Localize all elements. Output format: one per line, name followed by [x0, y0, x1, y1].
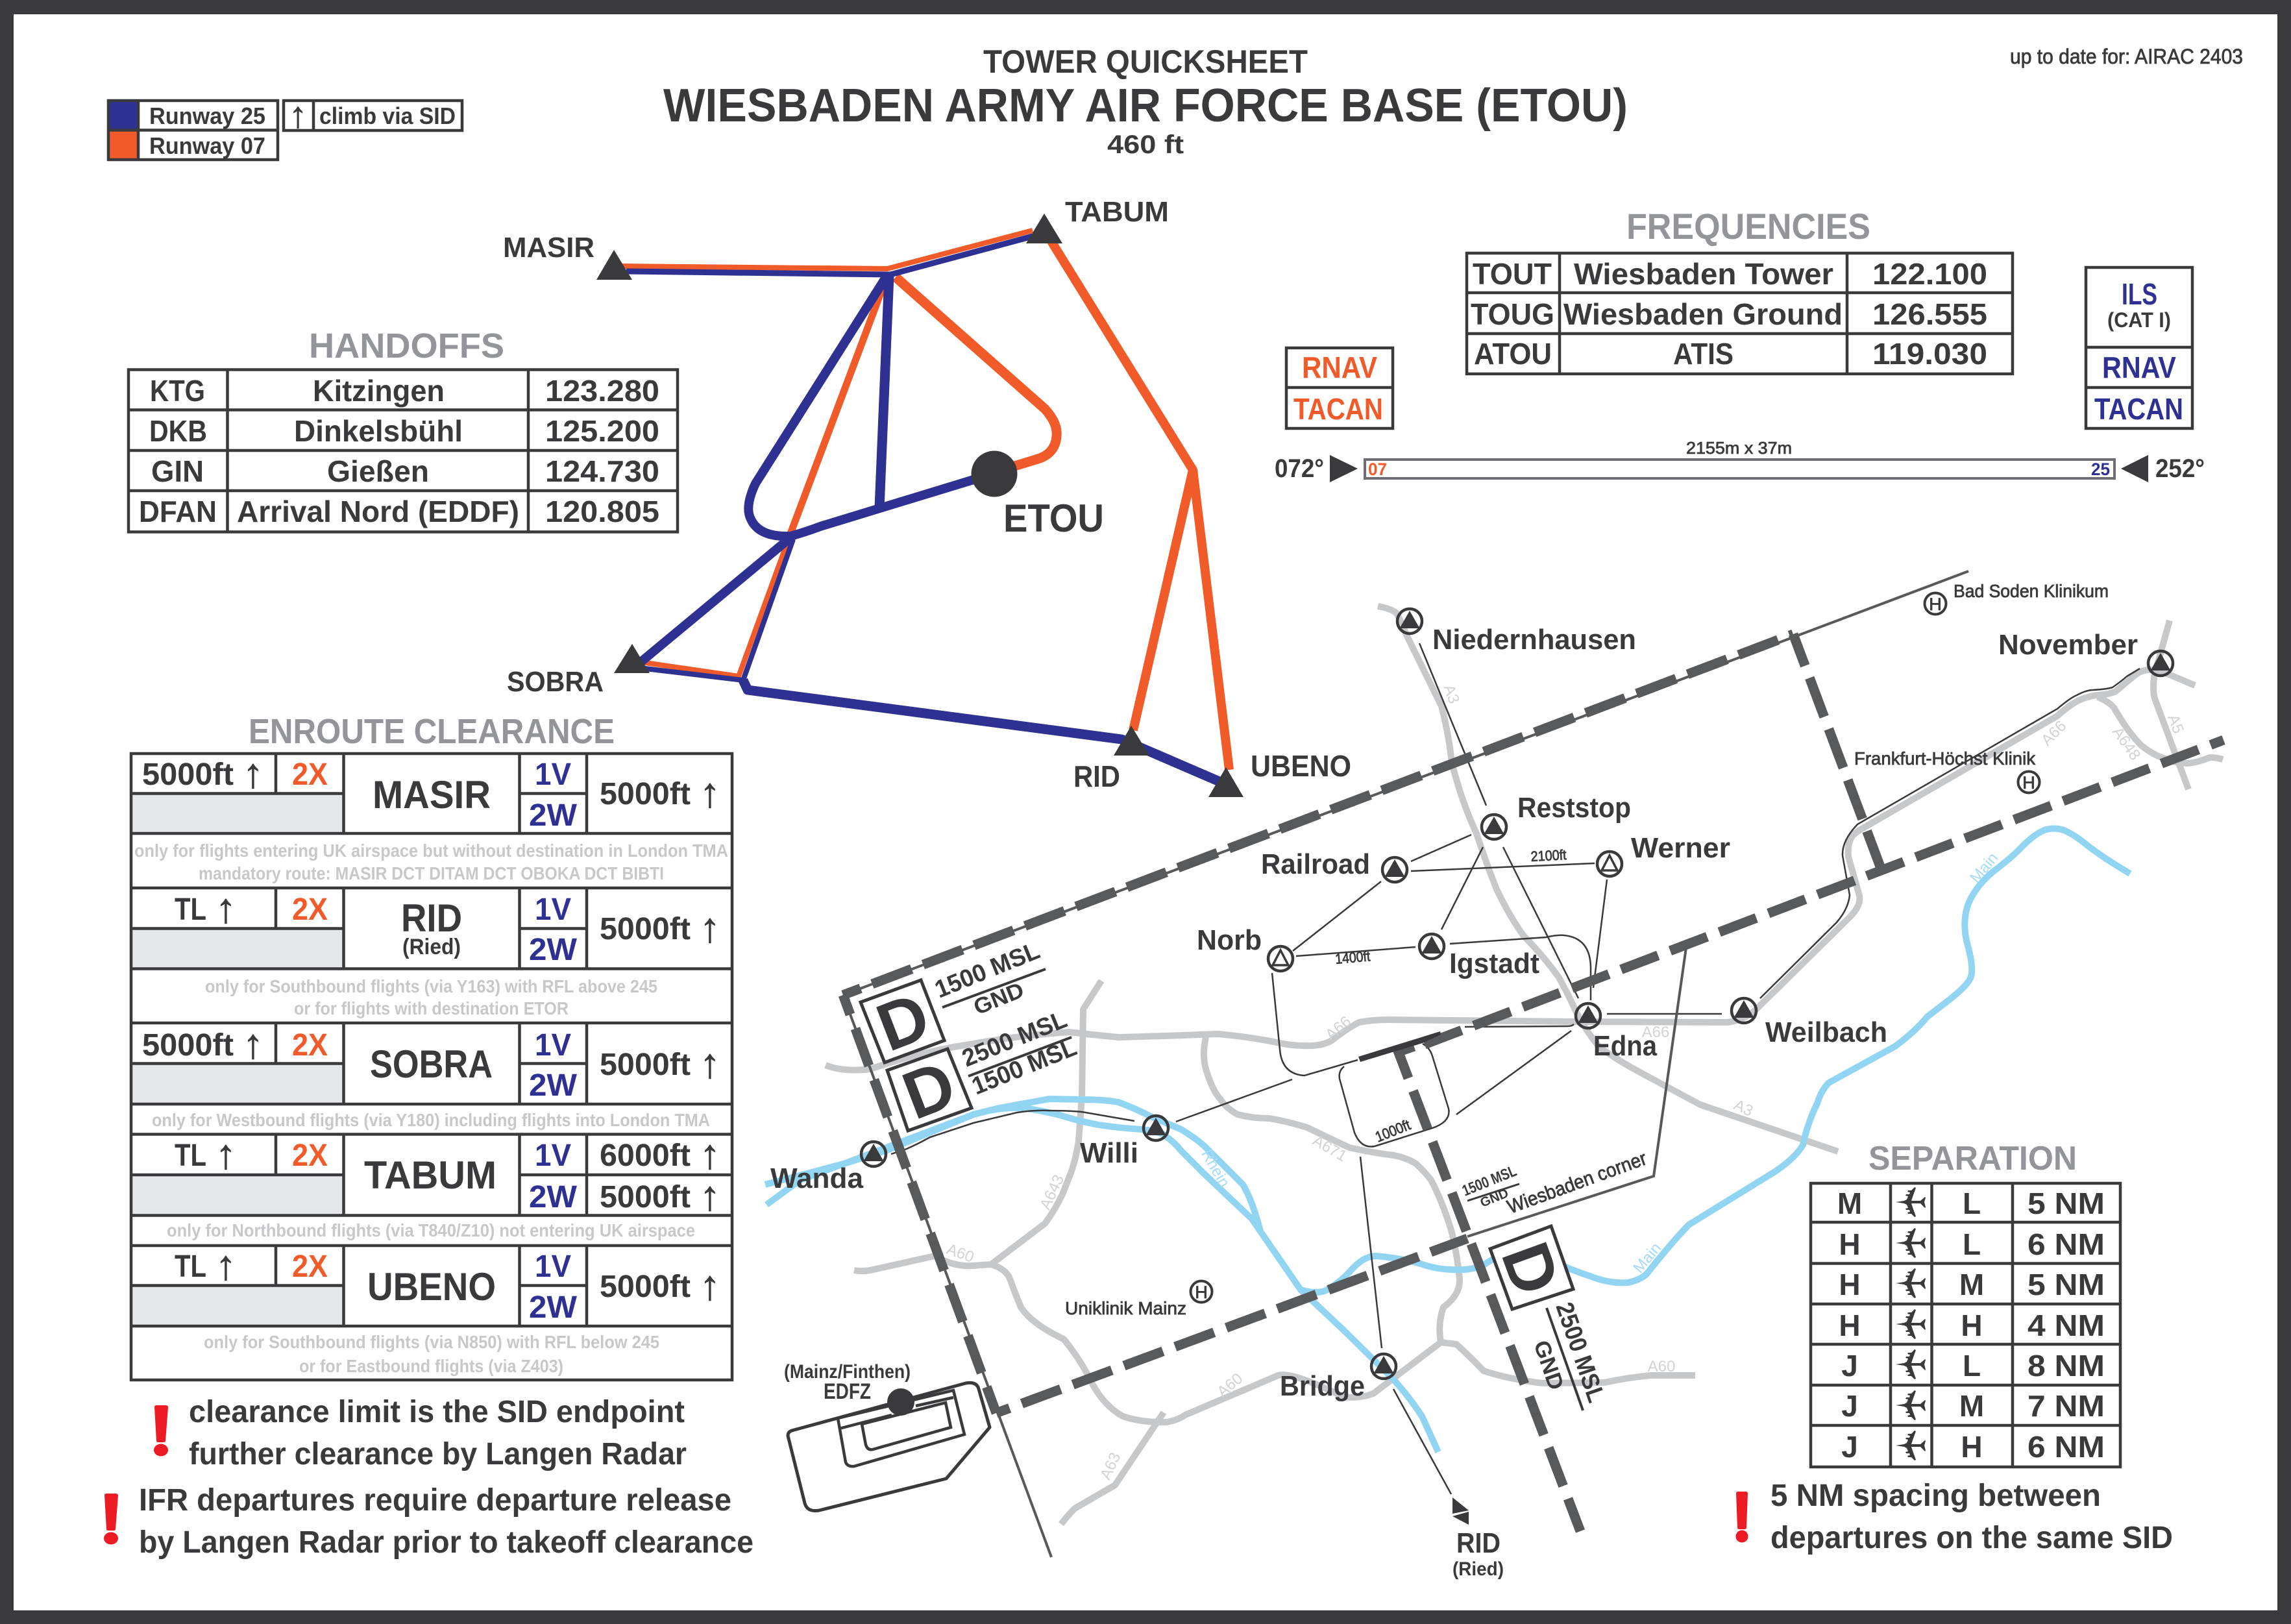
frequencies table: TOUT [1473, 257, 1552, 291]
roads [826, 606, 2223, 1524]
row: UBENO: 5000ft [600, 1270, 691, 1304]
airspace D box: 2500 MSL over 1500 MSL: 1500 MSL [968, 1034, 1081, 1100]
road and river labels: A66 [1322, 1013, 1354, 1044]
road and river labels [944, 682, 2187, 1483]
frequencies table: ATIS [1673, 337, 1734, 371]
road and river labels: A66 [1642, 1024, 1669, 1041]
distances: 5 NM [2028, 1268, 2105, 1301]
row: TABUM: 2X [292, 1138, 328, 1173]
handoffs table: KTG [150, 374, 205, 408]
row: MASIR: 5000ft [142, 757, 234, 792]
wake pairs: L [1963, 1349, 1981, 1383]
waypoint: Igstadt [1419, 934, 1539, 979]
row: TABUM: 1V [535, 1138, 571, 1173]
hospital: Uniklinik Mainz [1065, 1281, 1212, 1318]
altitude labels: 1000ft [1373, 1116, 1413, 1146]
callout: clearance limit: clearance limit is the SID endpoint [189, 1395, 685, 1429]
title block: 460 ft [1107, 130, 1184, 159]
runway 07 approaches box: TACAN [1293, 392, 1383, 426]
row: RID: ↑ [215, 885, 236, 931]
airport: ETOU [971, 450, 1104, 540]
waypoint: Reststop [1482, 792, 1631, 839]
row: TABUM: TABUM [364, 1153, 496, 1197]
row: UBENO: TL [175, 1249, 206, 1284]
airspace D box: 2500 MSL over GND [1487, 1226, 1610, 1410]
row: RID: 5000ft [600, 912, 691, 946]
airspace D box: 1500 MSL over GND [861, 937, 1046, 1066]
waypoint: Edna: Edna [1593, 1030, 1657, 1062]
map: control zone [765, 571, 2224, 1580]
wake pairs: M [1959, 1268, 1984, 1301]
fix: SOBRA: SOBRA [507, 666, 604, 698]
row: SOBRA: 2X [292, 1028, 328, 1063]
row: TABUM: only for Northbound flights (via T840/Z10) not entering UK airspace [167, 1220, 695, 1240]
row: UBENO: ↑ [215, 1242, 236, 1288]
heading: enroute clearance: ENROUTE CLEARANCE [249, 712, 615, 751]
road and river labels: Main [1966, 850, 2002, 887]
callout: SID spacing: departures on the same SID [1770, 1521, 2173, 1555]
hospital: Bad Soden Klinikum [1925, 581, 2109, 614]
waypoint: Edna [1576, 1003, 1657, 1062]
row: RID: ↑ [700, 904, 720, 951]
legend: Runway 07 [149, 132, 265, 159]
row: SOBRA: ↑ [700, 1040, 720, 1087]
title block: TOWER QUICKSHEET [983, 43, 1308, 80]
waypoint: Bridge: Bridge [1280, 1370, 1365, 1402]
wake pairs [1837, 1187, 1984, 1464]
enroute clearance table [131, 750, 732, 1380]
wake pairs: L [1963, 1227, 1981, 1261]
row: RID: RID [401, 896, 462, 940]
road and river labels: A60 [1214, 1370, 1246, 1401]
row: UBENO [175, 1242, 720, 1376]
road and river labels: A60 [1648, 1358, 1675, 1375]
row: UBENO: 2X [292, 1249, 328, 1284]
airspace D box: 2500 MSL over 1500 MSL: 2500 MSL [959, 1006, 1071, 1072]
handoffs table: DFAN [139, 495, 217, 528]
waypoint: Weilbach [1732, 998, 1887, 1048]
fix: RID [1073, 726, 1149, 793]
row: TABUM: 5000ft [600, 1180, 691, 1214]
runway diagram: 2155m x 37m [1686, 438, 1792, 458]
runway 07 approaches box [1286, 348, 1393, 428]
runway diagram: 072° [1275, 454, 1324, 483]
frequencies table: Wiesbaden Tower [1574, 257, 1833, 291]
runway 25 approaches box: ILS [2122, 277, 2157, 311]
altitude labels: 2100ft [1530, 846, 1567, 865]
RID exit fix: (Ried) [1452, 1558, 1504, 1580]
small airspace label and Wiesbaden corner [1460, 1148, 1650, 1218]
row: SOBRA: only for Westbound flights (via Y180) including flights into London TMA [152, 1110, 710, 1130]
AIRAC note: up to date for: AIRAC 2403 [2010, 45, 2243, 68]
row: SOBRA: 2W [529, 1068, 578, 1103]
hospital: Uniklinik Mainz: H [1195, 1283, 1208, 1302]
handoffs table: Gießen [327, 454, 429, 488]
chart: SID route diagram [503, 196, 1351, 797]
row: SOBRA: ↑ [243, 1020, 263, 1067]
small airspace label and Wiesbaden corner: 1500 MSL [1460, 1163, 1519, 1200]
row: TABUM: ↑ [215, 1131, 236, 1177]
fix: RID: RID [1073, 759, 1120, 793]
wake pairs: J [1841, 1430, 1858, 1464]
row: SOBRA: 1V [535, 1028, 571, 1063]
frequencies table: 126.555 [1872, 297, 1987, 331]
row: UBENO: ↑ [700, 1262, 720, 1309]
callout: departure release: IFR departures require departure release [139, 1483, 731, 1518]
row: MASIR: 2X [292, 757, 328, 792]
frequencies table: TOUG [1471, 297, 1554, 331]
wake pairs: J [1841, 1389, 1858, 1423]
hospital: Frankfurt-Höchst Klinik: H [2022, 773, 2035, 793]
thin procedure lines [891, 643, 2140, 1494]
row: SOBRA: 5000ft [142, 1028, 234, 1063]
wake pairs: H [1839, 1309, 1861, 1342]
row: SOBRA: SOBRA [370, 1042, 493, 1086]
row: TABUM: ↑ [700, 1172, 720, 1219]
airfield: EDFZ Mainz/Finthen: (Mainz/Finthen) [784, 1361, 911, 1383]
distances: 5 NM [2028, 1187, 2105, 1220]
frequencies table: 122.100 [1872, 257, 1987, 291]
row: RID: (Ried) [402, 935, 461, 959]
waypoint: Norb [1197, 924, 1293, 971]
runway diagram: 07 [1368, 460, 1387, 479]
row: RID [175, 885, 720, 1018]
hospital: Bad Soden Klinikum: Bad Soden Klinikum [1954, 581, 2109, 601]
row: UBENO: or for Eastbound flights (via Z403) [299, 1356, 563, 1376]
title block [663, 43, 1628, 159]
row: SOBRA [142, 1020, 720, 1130]
small airspace label and Wiesbaden corner: Wiesbaden corner [1504, 1148, 1650, 1218]
hospital: Uniklinik Mainz: Uniklinik Mainz [1065, 1298, 1186, 1318]
handoffs table: 124.730 [545, 454, 659, 488]
altitude labels [1334, 846, 1567, 1146]
runway 25 approaches box: RNAV [2102, 351, 2176, 384]
wake pairs: H [1839, 1268, 1861, 1301]
handoffs table: DKB [149, 414, 207, 448]
row: RID: TL [175, 892, 206, 927]
legend [108, 94, 462, 160]
fix: MASIR [503, 232, 632, 280]
row: MASIR: mandatory route: MASIR DCT DITAM DCT OBOKA DCT BIBTI [199, 863, 664, 883]
waypoint: Norb: Norb [1197, 924, 1262, 956]
distances: 6 NM [2028, 1227, 2105, 1261]
road and river labels: A5 [2164, 712, 2187, 736]
row: MASIR: ↑ [700, 769, 720, 816]
fix: UBENO [1208, 749, 1351, 797]
row: MASIR: 5000ft [600, 777, 691, 811]
heading: frequencies: FREQUENCIES [1626, 206, 1870, 247]
airfield: EDFZ Mainz/Finthen: EDFZ [824, 1379, 871, 1404]
RID exit fix [1452, 1497, 1504, 1580]
callout: clearance limit: further clearance by Langen Radar [189, 1437, 687, 1471]
hospital: Bad Soden Klinikum: H [1929, 595, 1942, 614]
handoffs table: Kitzingen [313, 374, 445, 408]
waypoint: Weilbach: Weilbach [1765, 1016, 1887, 1048]
road and river labels: A3 [1440, 682, 1463, 706]
frequencies table: Wiesbaden Ground [1563, 297, 1843, 331]
waypoint: Niedernhausen [1397, 609, 1636, 656]
row: RID: or for flights with destination ETOR [294, 998, 569, 1018]
altitude labels: 1400ft [1334, 948, 1371, 967]
heading: separation: SEPARATION [1868, 1140, 2077, 1177]
title block: WIESBADEN ARMY AIR FORCE BASE (ETOU) [663, 80, 1628, 132]
waypoint: Werner [1597, 832, 1730, 876]
hospital: Frankfurt-Höchst Klinik [1854, 748, 2039, 793]
waypoint: Railroad: Railroad [1261, 848, 1370, 880]
waypoint: Igstadt: Igstadt [1449, 948, 1539, 979]
distances: 7 NM [2028, 1389, 2105, 1423]
runway diagram: 252° [2155, 454, 2205, 483]
waypoint: Werner: Werner [1631, 832, 1730, 864]
row: UBENO: 2W [529, 1290, 578, 1325]
route: blue runway 25 routes [626, 236, 1221, 782]
runway 25 approaches box [2086, 267, 2192, 428]
row: TABUM: 6000ft [600, 1138, 691, 1173]
waypoint: Wanda: Wanda [770, 1163, 864, 1194]
row: MASIR: 2W [529, 798, 578, 833]
fix: TABUM [1026, 196, 1169, 243]
callout: SID spacing: 5 NM spacing between [1770, 1479, 2101, 1513]
handoffs table [129, 369, 678, 532]
airspace D box: 2500 MSL over GND: D [1487, 1233, 1574, 1305]
handoffs table: GIN [151, 454, 204, 488]
row: RID: 1V [535, 892, 571, 927]
row: MASIR: 1V [535, 757, 571, 792]
distances: 4 NM [2028, 1309, 2105, 1342]
row: RID: 2X [292, 892, 328, 927]
wake pairs: H [1961, 1309, 1983, 1342]
row: TABUM: ↑ [700, 1131, 720, 1177]
frequencies table: 119.030 [1872, 337, 1987, 371]
legend: ↑ [289, 94, 307, 135]
runway diagram: 25 [2091, 460, 2110, 479]
fix: MASIR: MASIR [503, 232, 594, 264]
small airspace label and Wiesbaden corner: GND [1478, 1186, 1511, 1211]
airspace D box: 2500 MSL over GND: 2500 MSL [1550, 1299, 1610, 1406]
wake pairs: L [1963, 1187, 1981, 1220]
handoffs table: 123.280 [545, 374, 659, 408]
road and river labels: A648 [2109, 724, 2144, 763]
legend: Runway 25 [149, 103, 265, 129]
runway diagram [1275, 438, 2205, 483]
icons: airplanes [1896, 1187, 1926, 1460]
fix: TABUM: TABUM [1065, 196, 1169, 228]
hospital: Frankfurt-Höchst Klinik: Frankfurt-Höchst Klinik [1854, 748, 2036, 769]
road and river labels: A66 [2038, 717, 2070, 749]
route: orange runway 07 routes [621, 230, 1229, 770]
row: MASIR [134, 750, 728, 883]
row: UBENO: UBENO [367, 1265, 496, 1309]
row: MASIR: ↑ [243, 750, 263, 796]
road and river labels: A3 [1731, 1096, 1756, 1120]
airfield: EDFZ Mainz/Finthen [784, 1361, 990, 1511]
fix: SOBRA [507, 644, 650, 698]
road and river labels: A60 [944, 1240, 976, 1266]
waypoint: Reststop: Reststop [1517, 792, 1631, 824]
handoffs table: Arrival Nord (EDDF) [237, 495, 519, 528]
legend: climb via SID [319, 103, 456, 129]
row: TABUM: 2W [529, 1180, 578, 1214]
airspace D box: 2500 MSL over GND: GND [1528, 1337, 1569, 1393]
airspace D box: 2500 MSL over 1500 MSL [887, 1006, 1081, 1134]
road and river labels: A63 [1097, 1450, 1124, 1483]
handoffs table: Dinkelsbühl [294, 414, 463, 448]
wake pairs: H [1839, 1227, 1861, 1261]
row: SOBRA: 5000ft [600, 1048, 691, 1082]
wake pairs: M [1837, 1187, 1862, 1220]
row: UBENO: 1V [535, 1249, 571, 1284]
waypoint: Willi [1080, 1116, 1168, 1169]
road and river labels: A671 [1310, 1132, 1350, 1165]
runway 25 approaches box: TACAN [2094, 392, 2183, 426]
airspace D box: 1500 MSL over GND: GND [970, 978, 1027, 1020]
fix: UBENO: UBENO [1251, 749, 1351, 783]
heading: handoffs: HANDOFFS [309, 326, 504, 365]
wake pairs: J [1841, 1349, 1858, 1383]
runway 25 approaches box: (CAT I) [2107, 308, 2171, 332]
waypoint: November: November [1998, 629, 2138, 661]
road and river labels: A643 [1036, 1172, 1068, 1212]
distances: 8 NM [2028, 1349, 2105, 1383]
handoffs table: 120.805 [545, 495, 659, 528]
waypoint: Wanda [770, 1142, 886, 1194]
runway 07 approaches box: RNAV [1302, 351, 1377, 384]
wake pairs: M [1959, 1389, 1984, 1423]
callout: clearance limit [154, 1395, 687, 1471]
waypoint: Bridge [1280, 1354, 1396, 1402]
row: MASIR: only for flights entering UK airspace but without destination in London TMA [134, 841, 728, 861]
row: RID: 2W [529, 933, 578, 967]
row: UBENO: only for Southbound flights (via N850) with RFL below 245 [204, 1332, 659, 1352]
wake pairs: H [1961, 1430, 1983, 1464]
frequencies table: ATOU [1474, 337, 1552, 371]
callout: SID spacing [1735, 1479, 2173, 1555]
row: RID: only for Southbound flights (via Y163) with RFL above 245 [205, 976, 657, 996]
row: MASIR: MASIR [373, 773, 491, 817]
row: TABUM [167, 1131, 720, 1240]
waypoint: Willi: Willi [1080, 1137, 1138, 1169]
callout: departure release: by Langen Radar prior to takeoff clearance [139, 1525, 753, 1560]
RID exit fix: RID [1456, 1527, 1501, 1559]
airspace D box: 1500 MSL over GND: D [867, 978, 940, 1066]
airspace D box: 2500 MSL over 1500 MSL: D [893, 1046, 966, 1134]
separation table [1811, 1183, 2120, 1467]
airspace D box: 1500 MSL over GND: 1500 MSL [931, 937, 1044, 1003]
road and river labels: Rhein [1197, 1146, 1233, 1190]
road and river labels: Main [1630, 1240, 1665, 1277]
row: TABUM: TL [175, 1138, 206, 1173]
distances: 6 NM [2028, 1430, 2105, 1464]
distances [2028, 1187, 2105, 1464]
rivers [765, 828, 2130, 1452]
callout: departure release [104, 1483, 753, 1560]
waypoint: Niedernhausen: Niedernhausen [1432, 624, 1636, 656]
frequencies table [1467, 253, 2013, 374]
handoffs table: 125.200 [545, 414, 659, 448]
airspace boundaries [843, 571, 2224, 1557]
airport: ETOU: ETOU [1003, 497, 1104, 540]
waypoint: November [1998, 629, 2173, 676]
